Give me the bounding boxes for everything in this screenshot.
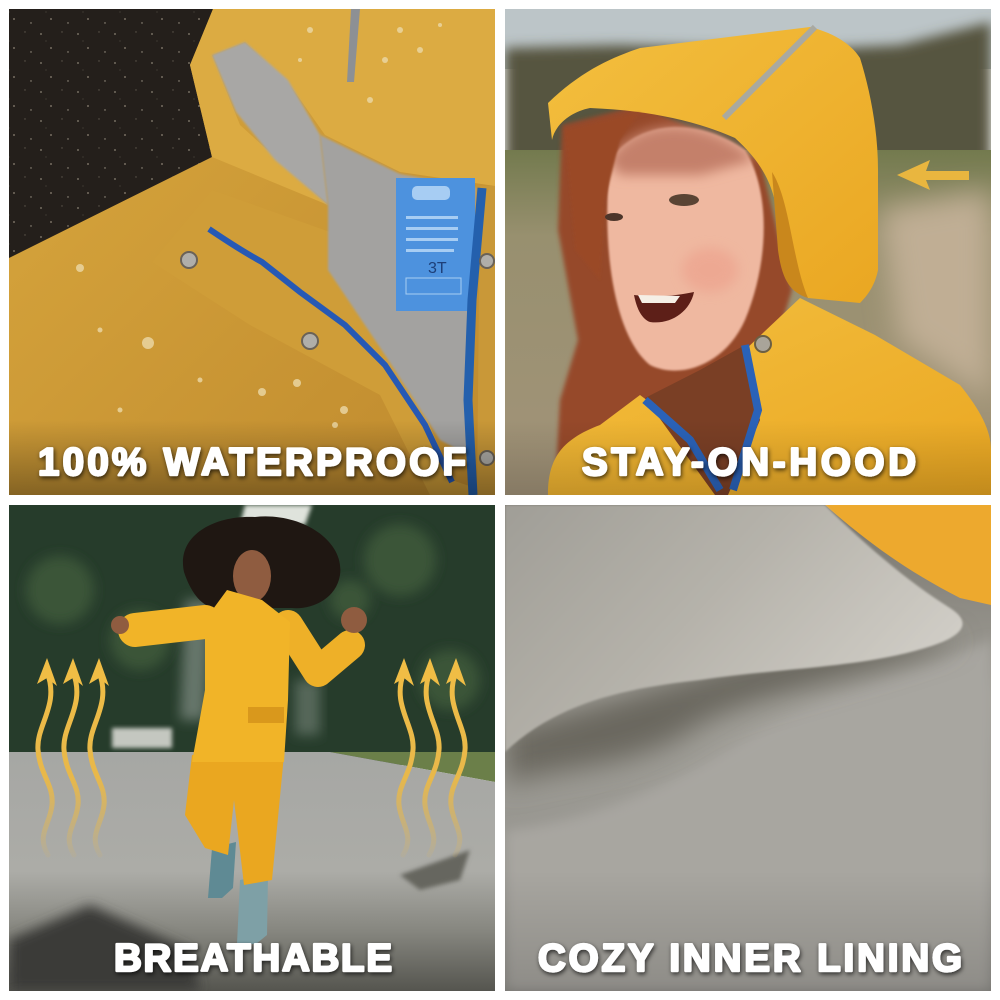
- bottom shade: [505, 870, 991, 991]
- fleece hood interior: [212, 42, 328, 205]
- forehead shadow: [608, 126, 755, 175]
- caption: breathable: BREATHABLE: [114, 937, 392, 980]
- shadow under fold: [505, 630, 960, 785]
- hair fringe: [602, 111, 640, 197]
- heat waves right arrowheads: [394, 658, 466, 686]
- snap: [755, 336, 771, 352]
- inner dark collar: [645, 345, 760, 495]
- fleece lining: [320, 135, 476, 455]
- snap buttons: [181, 252, 494, 465]
- field: [505, 150, 991, 495]
- houses in distance: [112, 728, 172, 748]
- bottom shade: [9, 429, 495, 495]
- asphalt background: [9, 9, 213, 258]
- road: [9, 752, 495, 991]
- water droplets: [76, 23, 442, 428]
- heat waves left arrowheads: [37, 658, 109, 686]
- hood reflective strip: [347, 9, 360, 82]
- blue care label: 3T: [428, 260, 447, 277]
- jacket base: [9, 9, 495, 495]
- caption: stay-on-hood: STAY-ON-HOOD: [582, 441, 916, 484]
- sky: [505, 9, 991, 69]
- panel: cozy inner lining: [505, 505, 991, 991]
- field sand patch: [880, 190, 991, 400]
- blue zipper vertical: [468, 188, 482, 495]
- bottom shade: [505, 435, 991, 495]
- lower fleece: [505, 505, 991, 991]
- puddle right: [400, 850, 470, 890]
- jacket hood: [190, 9, 495, 205]
- hair: [183, 516, 340, 608]
- tree line: [505, 22, 991, 165]
- collar flap: [290, 296, 468, 495]
- upper fleece fold: [505, 505, 963, 752]
- panel: breathable: [9, 505, 495, 991]
- caption: cozy inner lining: COZY INNER LINING: [538, 937, 962, 980]
- blue care label: [396, 178, 475, 311]
- right boot: [237, 875, 268, 944]
- lower light mound: [505, 640, 991, 991]
- pale gap behind right arm: [295, 680, 320, 735]
- right sleeve: [288, 625, 350, 672]
- blue zipper slanted: [209, 229, 452, 482]
- caption: 100% waterproof: 100% WATERPROOF: [38, 441, 466, 484]
- foliage: [26, 524, 480, 710]
- cheek: [682, 248, 738, 292]
- jacket shoulders: [548, 298, 991, 495]
- heat waves left: [38, 672, 104, 855]
- puddle: [9, 905, 200, 991]
- smile: [634, 292, 694, 322]
- pale gap beside child: [180, 600, 212, 720]
- blue zipper: [645, 345, 758, 490]
- panel: 100% waterproof: [9, 9, 495, 495]
- hood gathered elastic: [772, 172, 808, 298]
- grass: [330, 752, 495, 782]
- hood: [548, 27, 878, 303]
- hood reflective strip: [724, 27, 815, 118]
- eye right: [669, 194, 699, 206]
- face: [607, 127, 764, 371]
- jacket pocket: [248, 707, 284, 723]
- eye left: [605, 213, 623, 221]
- left hand: [111, 616, 129, 634]
- sky gap: [240, 505, 312, 525]
- arrow pointing at hood: [897, 160, 969, 190]
- orange jacket corner: [825, 505, 991, 605]
- left boot: [208, 842, 236, 898]
- right front strip: [478, 304, 495, 494]
- hair: [556, 105, 792, 490]
- teeth: [638, 295, 680, 303]
- child: [111, 516, 367, 944]
- left sleeve: [135, 622, 205, 630]
- trousers: [185, 755, 284, 885]
- right hand: [341, 607, 367, 633]
- face: [233, 550, 271, 602]
- heat waves right: [399, 672, 465, 855]
- jacket body: [192, 590, 290, 762]
- panel: stay-on-hood: [505, 9, 991, 495]
- trees background: [9, 505, 495, 765]
